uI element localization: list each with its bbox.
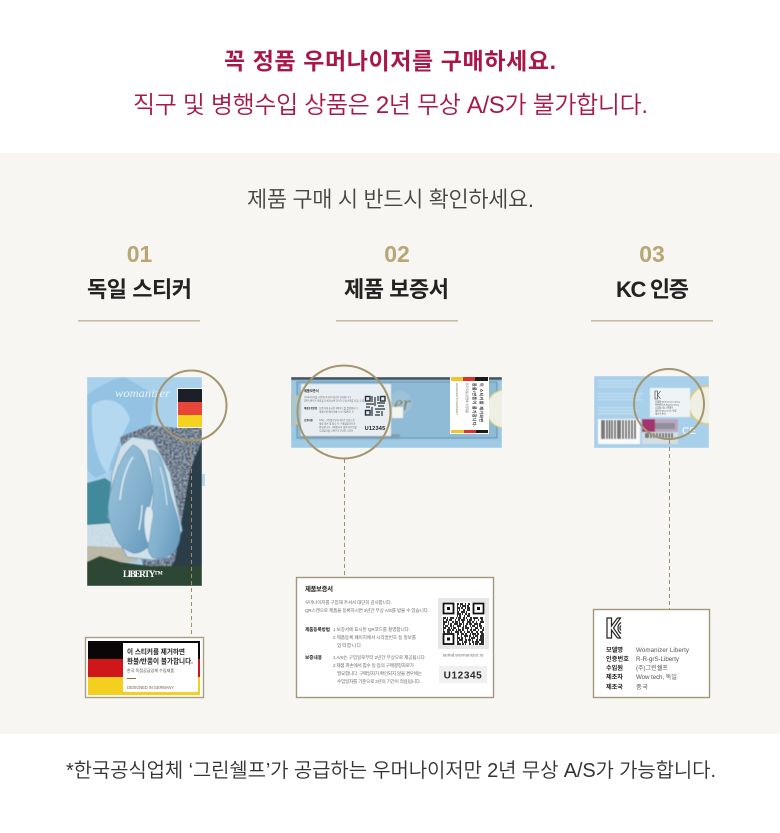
heading: 01 독일 스티커: 01	[127, 241, 152, 267]
warranty text: 입력합니다.	[337, 642, 363, 649]
warranty card text: 수입일자를 기준으로 2년의 기간이	[319, 428, 353, 432]
title: 직구 및 병행수입 상품은 2년 무상 A/S가 불가합니다.	[133, 92, 648, 119]
warranty text: 제품등록방법	[305, 626, 330, 633]
KC card miniature: 인증번호 R-R-grS-Liberty	[655, 402, 680, 406]
sticker: rotated flag sticker: 이 스티커를 제거하면	[479, 383, 484, 422]
text: LIBERTY: LIBERTY™	[123, 569, 163, 579]
product photo: KC on box back	[594, 376, 709, 448]
sticker: German flag on package	[177, 388, 202, 428]
panel: grey background section	[0, 153, 780, 734]
warranty text: 1 보증서에 표시된 QR코드를 촬영합니다.	[333, 626, 410, 633]
KC card miniature: 수입원 (주)그린쉘프	[655, 406, 673, 410]
KC data rows: 인증번호	[606, 655, 629, 663]
label: sticker detail: 한국 독점공급업체 수입제품	[127, 667, 174, 673]
KC data rows: 제조국	[606, 683, 623, 691]
title: 꼭 정품 우머나이저를 구매하세요.	[224, 48, 556, 74]
warranty card text: QR스캔으로 제품을 등록하시면 2년간 무상 A/S를 받을 수 있습니다.	[304, 398, 372, 402]
KC data rows: 모델명	[606, 646, 623, 654]
KC data rows: Womanizer Liberty	[636, 647, 690, 654]
warranty card text: 필요합니다. 구매일자가 확인되지 않을	[319, 425, 358, 429]
KC data rows: (주)그린쉘프	[636, 664, 668, 672]
KC data rows: 수입원	[606, 664, 623, 672]
dashed connector 3	[668, 440, 670, 609]
warranty text: 수입일자를 기준으로 2년의 기간이 적용됩니다.	[337, 678, 421, 685]
warranty text: 보증내용	[305, 654, 323, 661]
heading: 01 독일 스티커	[78, 241, 200, 322]
label: sticker detail: 환불/반품이 불가합니다.	[127, 656, 193, 666]
KC card miniature	[655, 391, 681, 416]
highlight circle 1	[156, 370, 226, 440]
small QR code	[364, 395, 386, 417]
warranty text: 필요합니다. 구매일자가 확인되지 않을 경우에는	[337, 670, 422, 677]
warranty text: QR스캔으로 제품을 등록하시면 2년간 무상 A/S를 받을 수 있습니다.	[305, 607, 429, 614]
warranty card text: 제품보증서	[304, 388, 319, 393]
warranty text	[305, 584, 429, 685]
footer note: *한국공식업체 ‘그린쉘프’가 공급하는 우머나이저만 2년 무상 A/S가 가능합니다.	[66, 759, 716, 782]
warranty card text: 보증내용	[304, 418, 314, 422]
label: sticker detail: 이 스티커를 제거하면	[127, 647, 185, 656]
warranty text: 제품보증서	[305, 584, 333, 593]
label: sticker detail: DESIGNED IN GERMANY	[127, 685, 174, 690]
warranty card text: 우머나이저를 구입해 주셔서 대단히 감사합니다.	[304, 395, 352, 399]
text: serial url: serial.womanizer.io	[443, 652, 484, 658]
label: warranty card	[296, 578, 494, 698]
label: sticker detail	[86, 638, 204, 698]
dashed connector 1	[190, 441, 192, 637]
text: serial number box	[439, 666, 487, 683]
highlight circle 2	[298, 366, 390, 458]
heading: 03 KC 인증	[591, 241, 713, 322]
warranty card text: 제품 파손 및 침수 등 구매결정자로가	[319, 422, 356, 426]
KC card miniature: 제조국 중국	[655, 412, 666, 416]
heading: 02 제품 보증서	[336, 241, 458, 322]
KC card miniature: 모델명 Womanizer Liberty	[655, 400, 681, 404]
heading: 03 KC 인증: 03	[639, 241, 665, 267]
warranty text: 2 제품등록 페이지에서 시리얼번호 등 정보를	[333, 634, 416, 641]
heading: 02 제품 보증서: 02	[384, 241, 410, 267]
heading: 01 독일 스티커: 독일 스티커	[87, 277, 192, 302]
KC data rows: 중국	[636, 684, 648, 691]
certification marks: CE	[682, 426, 696, 437]
text: womanizer logo: womanizer	[115, 386, 170, 400]
title	[133, 48, 648, 119]
warranty card text: 제품등록방법	[304, 406, 317, 410]
KC data rows: 제조자	[606, 673, 623, 681]
warranty text: 1 A/S는 구입일로부터 2년간 무상으로 제공됩니다.	[333, 654, 426, 661]
KC data rows	[606, 646, 690, 691]
warranty card text	[304, 388, 364, 432]
warranty card text: A/S는 구입일로부터 2년간 무상으로	[319, 418, 356, 422]
warranty card text: 보증서에 표시된 QR코드를 촬영합니다.	[319, 406, 359, 410]
QR code	[438, 598, 489, 649]
sticker: rotated flag sticker	[450, 377, 489, 434]
icon: KC mark	[607, 618, 621, 638]
KC card miniature: 제조자 Wow tech, 독일	[655, 408, 676, 412]
text: serial on box: U12345	[365, 426, 385, 432]
heading: 03 KC 인증: KC 인증	[616, 277, 689, 302]
label: KC certification	[594, 610, 710, 698]
sticker: rotated flag sticker: 환불/반품이 불가합니다.	[472, 383, 477, 427]
KC data rows: Wow tech, 독일	[636, 673, 677, 681]
warranty text: 2 제품 파손에서 침수 등 등의 구매결정자로가	[333, 662, 415, 669]
product photo: Liberty package front	[87, 377, 202, 586]
product photo: warranty on box	[291, 377, 502, 448]
section heading: 제품 구매 시 반드시 확인하세요.	[247, 187, 534, 212]
heading: 02 제품 보증서: 제품 보증서	[344, 277, 449, 302]
warranty card text: 제품등록 페이지에서 시리얼번호 등	[319, 410, 355, 414]
highlight circle 3	[634, 369, 704, 439]
product photo: warranty on box: er	[394, 393, 411, 415]
dashed connector 2	[344, 459, 346, 577]
sticker: rotated flag sticker: 한국 독점공급업체 수입제품	[465, 383, 469, 413]
text: serial number box: U12345	[444, 670, 482, 682]
warranty text: 우머나이저를 구입해 주셔서 대단히 감사합니다.	[305, 599, 392, 606]
sticker: rotated flag sticker: DESIGNED IN GERMANY	[455, 383, 459, 415]
KC data rows: R-R-grS-Liberty	[636, 656, 680, 663]
